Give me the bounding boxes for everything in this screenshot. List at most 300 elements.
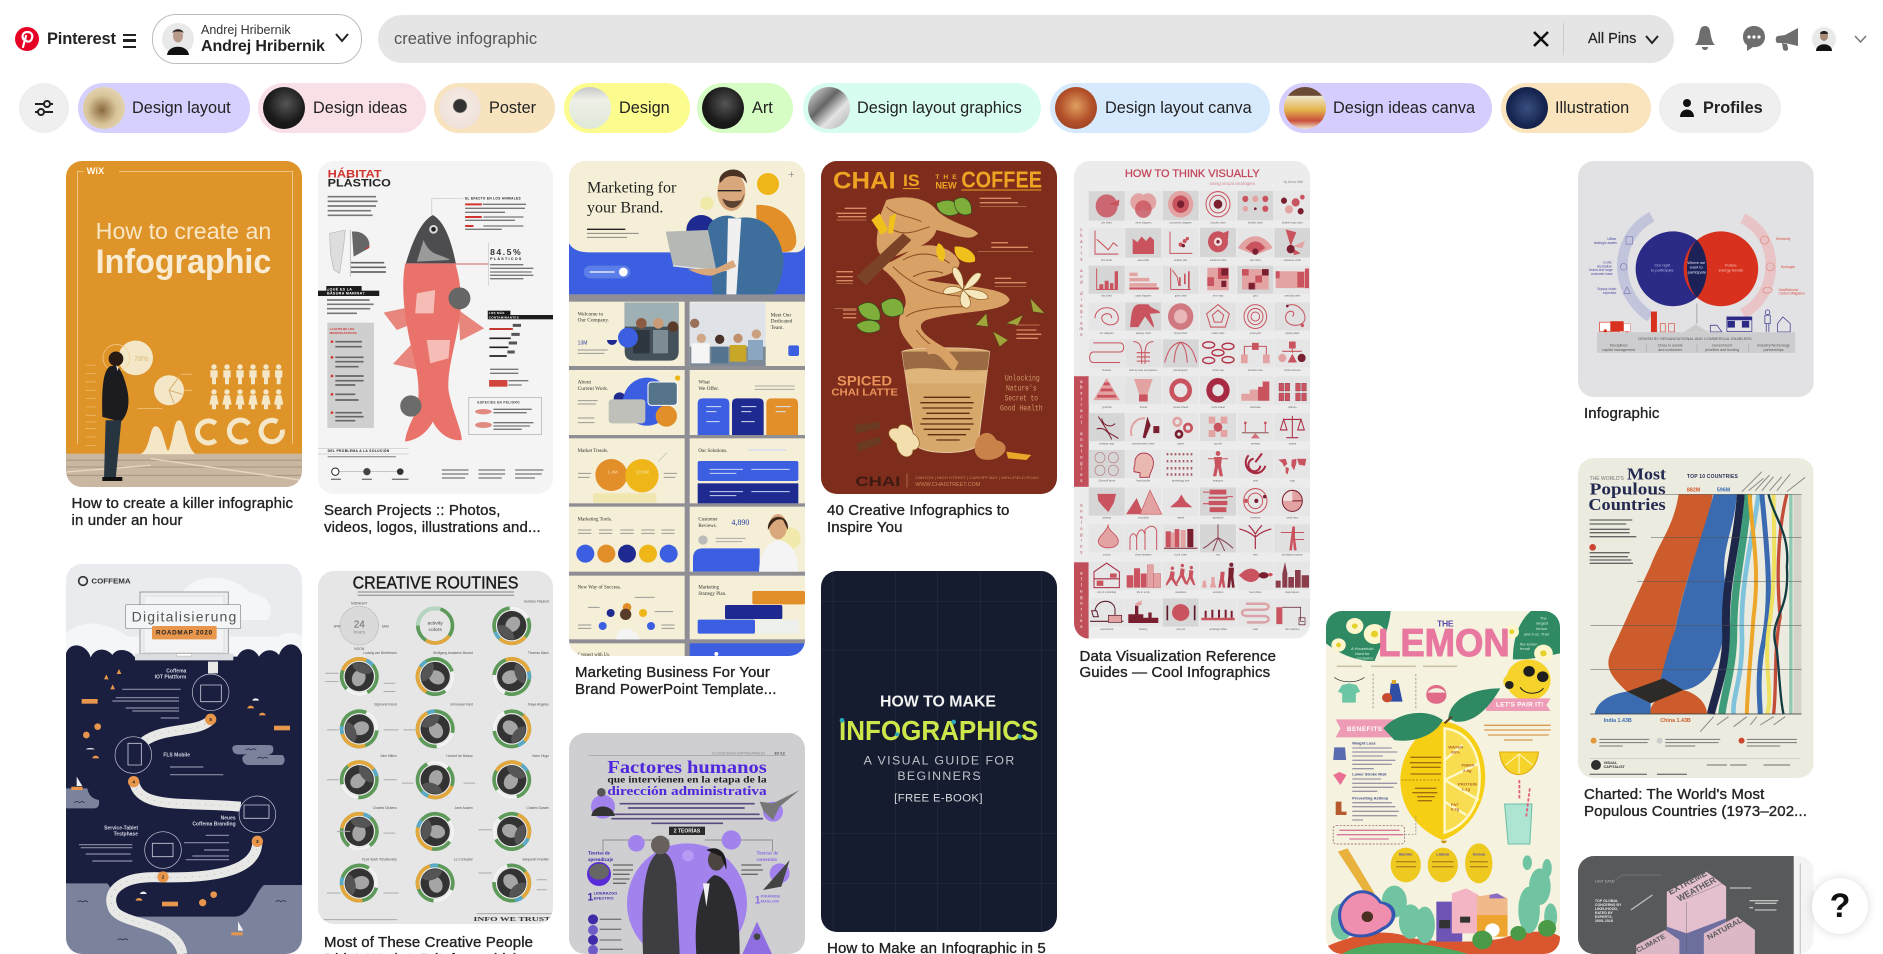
column label: EXTREME: [1666, 868, 1709, 897]
left text: TOP GLOBAL: [1595, 899, 1618, 903]
column label 2: WEATHER: [1675, 875, 1718, 903]
chip label: Profiles: [1703, 99, 1763, 117]
pin: marketing brand template: [569, 161, 805, 698]
right labels: Hydrogen: [1781, 265, 1795, 269]
leaf text: Centuries: [1356, 656, 1373, 660]
row 1: [1088, 191, 1310, 225]
row 1: circular chart: [1210, 220, 1225, 225]
poster image: human factors: [569, 733, 805, 954]
small circles and pyramid: [588, 914, 772, 954]
profile bold name: Andrej Hribernik: [201, 38, 325, 55]
argentina map: [330, 230, 386, 277]
left labels: brand and large: [1589, 268, 1613, 272]
from problem to solution: [318, 448, 543, 479]
row 6: funnel: [1139, 405, 1147, 409]
top countries heading: [1687, 474, 1739, 494]
flowers: [1331, 618, 1552, 662]
varieties: Lisbon: [1436, 853, 1449, 857]
profile avatar: [162, 23, 194, 55]
names: Ludwig van Beethoven: [363, 651, 397, 655]
names: Honoré de Balzac: [446, 754, 473, 758]
activity colors ring: [418, 608, 452, 643]
caption: 40 Creative Infographics to: [827, 502, 1010, 519]
right labels: Carbon Mitigation: [1779, 292, 1805, 296]
intro lines: [328, 197, 378, 215]
enablers bar: [1597, 332, 1795, 353]
slide: market trends: 10.5M: [636, 469, 649, 474]
pie charts: 78%: [134, 354, 149, 363]
row 3: bar chart: [1101, 293, 1112, 298]
row 1: venn diagram: [1135, 220, 1152, 225]
chip: Design layout: Design layout: [132, 99, 231, 117]
icon: all pins chevron: [1645, 35, 1659, 44]
row 12: one pot: [1176, 627, 1185, 631]
digitalisierung box: [125, 605, 240, 629]
slide: what we offer: We Offer.: [698, 385, 719, 392]
right labels: Electricity: [1776, 237, 1791, 241]
chip: Illustration: Illustration: [1555, 99, 1629, 117]
leaf text: [1351, 616, 1549, 660]
theories tag: [669, 827, 705, 835]
chip: Illustration: [1501, 83, 1651, 133]
plastic percentage: [455, 243, 533, 286]
venn labels: to participate: [1651, 267, 1674, 272]
scene: guitar: [1337, 848, 1395, 938]
pin: the lemon: [1326, 611, 1560, 954]
row 8: map: [1289, 480, 1295, 483]
leadership: MASLOW: [761, 899, 779, 904]
icon: bell: [1695, 26, 1715, 50]
caption: [1584, 786, 1807, 820]
enablers bar: DRIVEN BY ORGANISATIONAL AND COMMERCIAL ENABLERS: [1638, 337, 1752, 341]
title: [328, 167, 391, 190]
what is marine litter label: ¿QUÉ ES LA: [327, 286, 352, 291]
names: Benjamin Franklin: [522, 857, 549, 861]
caption: Guides — Cool Infographics: [1080, 664, 1270, 681]
venn labels: Our right: [1655, 262, 1671, 267]
slide: what we offer: What: [698, 380, 710, 386]
axis ticks: [85, 365, 95, 445]
row 2: nebulous chart: [1283, 258, 1301, 262]
pin: how to think visually: [1074, 161, 1310, 681]
24 hours clock: MIDNIGHT: [351, 601, 367, 605]
row 5: decision tree: [1247, 368, 1263, 372]
visual capitalist logo: VISUAL: [1604, 761, 1618, 765]
caption: Infographic: [1584, 405, 1660, 422]
leaf text: Used for: [1354, 652, 1370, 656]
lemon slice labels: [1448, 744, 1477, 812]
smiling lemon: [1503, 659, 1550, 701]
left labels: strategic assets: [1594, 241, 1617, 245]
mountains: [140, 420, 195, 454]
leadership: EFECTIVO: [594, 896, 614, 901]
bullets: [78, 689, 228, 861]
search divider: [1563, 23, 1564, 55]
row 4: polar grid: [1249, 331, 1261, 335]
tagline: Nature's: [1006, 384, 1037, 394]
lemon slice labels: FIBER: [1461, 763, 1474, 768]
caption: [1080, 648, 1276, 681]
caption: videos, logos, illustrations and...: [324, 519, 541, 536]
subtitle: using visual analogies: [1209, 181, 1255, 187]
title: Countries: [1588, 495, 1666, 514]
caption: [827, 502, 1010, 536]
row 4: radar chart: [1211, 331, 1224, 335]
lemon slice labels: 88%: [1451, 749, 1460, 754]
microplastics panel: [327, 323, 374, 428]
leaf text: A Household: [1351, 647, 1373, 651]
vertical labels: abstract analogies: [1078, 379, 1083, 484]
title: HÁBITAT: [328, 167, 382, 180]
benefits ribbon: [1335, 719, 1397, 737]
row 9: universe: [1250, 515, 1260, 519]
the lemon title: LEMON: [1378, 621, 1509, 665]
spiced chai latte: [831, 372, 898, 399]
brand footer: WWW.CHAISTREET.COM: [915, 482, 980, 488]
third column: [1635, 930, 1679, 954]
floor: [66, 454, 302, 487]
row 8: nest: [1252, 478, 1258, 483]
slice and glass: [1499, 752, 1538, 844]
side bands: [1074, 376, 1088, 638]
names: Charles Dickens: [373, 806, 397, 810]
row 1: bubble chart: [1248, 220, 1262, 225]
row 10: circulatory system: [1281, 552, 1303, 556]
caption: Most of These Creative People: [324, 934, 533, 951]
chip: Design ideas: [258, 83, 426, 133]
title: Factores humanos: [607, 757, 767, 777]
trees: [1472, 920, 1556, 949]
lower streams: [1595, 678, 1707, 714]
labels: Service-Tablet: [104, 825, 138, 831]
row 12: factory: [1139, 627, 1147, 631]
icon: account chevron: [1854, 36, 1866, 43]
benefit list: Weight Loss: [1352, 742, 1375, 746]
arc icons: [1620, 236, 1774, 294]
pin: creative routines: [318, 571, 553, 954]
portrait rings: [334, 601, 537, 908]
grid lines: [821, 571, 1057, 932]
lemon slice labels: PROTEIN: [1457, 781, 1477, 786]
bottom spices: [855, 422, 1031, 460]
venn labels: Future: [1725, 262, 1737, 267]
pin: venn infographic: [1578, 161, 1814, 422]
spiced chai latte: CHAI LATTE: [831, 388, 898, 399]
chip: Design ideas: Design ideas: [313, 99, 407, 117]
brand footer: CHAI: [855, 473, 900, 489]
pin: habitat plastico: [318, 161, 553, 536]
names: Gustave Flaubert: [524, 600, 549, 604]
polluter bars: [489, 329, 513, 356]
title: CHAI: [833, 168, 896, 195]
ring charts: [197, 420, 282, 443]
poster image: population streams: [1578, 458, 1814, 778]
bottom icons: [1600, 304, 1790, 333]
digitalisierung box: Digitalisierung: [131, 609, 236, 625]
brand footer: CANTON | HIGH STREET | CARDIFF BAY | WELLFIELD ROAD: [915, 475, 1039, 480]
lemon slice labels: FAT: [1450, 802, 1459, 807]
row 1: bubble map chart: [1282, 220, 1302, 225]
row 9: iceberg: [1102, 515, 1111, 519]
people icons: [209, 364, 283, 409]
chip: Design layout canva: Design layout canva: [1105, 99, 1252, 117]
slide: welcome: 13M: [578, 341, 587, 347]
number badges: [128, 714, 262, 883]
leaf text: the lemon: [1520, 642, 1537, 646]
left text: 2005–2018: [1595, 919, 1613, 923]
24 hours clock: 6PM: [334, 624, 341, 628]
number badges: 4: [132, 779, 135, 784]
names: Thomas Mann: [528, 651, 549, 655]
coffema logo: COFFEMA: [91, 577, 131, 586]
slide: marketing tools: [569, 507, 685, 572]
intro lines: [611, 804, 763, 823]
row 10: onions: [1102, 552, 1111, 556]
names: Pyotr Ilyich Tchaikovsky: [362, 857, 397, 861]
caption: Search Projects :: Photos,: [324, 502, 501, 519]
theories text left: Teorías de: [588, 852, 611, 857]
pin: how to create an infographic: [66, 161, 302, 529]
24 hours clock: 6AM: [382, 624, 389, 628]
chip: Art: Art: [752, 99, 773, 117]
icon: pinterest logo: [15, 27, 39, 51]
varieties: Bonnie: [1399, 853, 1412, 857]
bottom values: China 1.43B: [1660, 718, 1691, 724]
microplastics panel: MICROPLÁSTICOS: [330, 330, 357, 335]
row 2: scatter plot: [1174, 258, 1187, 262]
leadership: PIRÁMIDE: [761, 893, 781, 898]
subtitle: A VISUAL GUIDE FOR: [864, 753, 1014, 767]
names: Maya Angelou: [528, 703, 549, 707]
venn labels: want to: [1690, 264, 1703, 269]
chip: Poster: [434, 83, 555, 133]
venn labels: participate: [1688, 269, 1707, 274]
names: [362, 600, 549, 861]
title: NEW: [935, 181, 957, 191]
row 12: road: [1252, 627, 1258, 631]
slide: marketing strategy: Marketing: [698, 586, 720, 591]
free ebook: [FREE E-BOOK]: [894, 792, 982, 804]
names: John Milton: [380, 754, 397, 758]
right labels: Gas/Biofuels/: [1779, 288, 1798, 292]
labels: Coffema: [166, 669, 186, 675]
title: THE: [935, 174, 957, 181]
labels: Neues: [220, 815, 235, 821]
brand footer: [855, 473, 1039, 489]
flower: [943, 267, 988, 308]
row 10: chest headers: [1135, 552, 1152, 556]
row 8: [1088, 450, 1310, 483]
the lemon title: THE: [1437, 619, 1454, 629]
subtitle: BEGINNERS: [897, 769, 981, 783]
chip: Design: Design: [619, 99, 670, 117]
slide: new way of success: [569, 576, 685, 639]
endangered species box: [469, 397, 541, 435]
row 9: island: [1177, 515, 1184, 519]
row 3: gant chart: [1174, 293, 1186, 298]
row 3: grid: [1253, 293, 1258, 298]
row 8: head profile: [1136, 478, 1150, 483]
waves: [74, 749, 286, 940]
title: Populous: [1590, 480, 1666, 499]
number badges: 5: [209, 717, 212, 722]
number badges: 2: [161, 875, 164, 880]
pie charts: [102, 341, 192, 409]
enablers bar: Industry/Technology: [1757, 343, 1790, 347]
poster image: chai: [821, 161, 1057, 494]
wix logo: WiX: [86, 166, 104, 176]
row 6: spoke wheel: [1173, 405, 1188, 409]
names: Jane Austen: [455, 806, 473, 810]
search bar: [378, 15, 1674, 63]
left text: LIKELIHOOD,: [1595, 907, 1618, 911]
row 7: scales: [1288, 442, 1296, 446]
road: [111, 662, 257, 954]
slide: meet team: [690, 302, 805, 366]
enablers bar: Close to assets: [1658, 343, 1683, 347]
title: Most: [1627, 464, 1666, 483]
leaf text: The: [1539, 616, 1546, 620]
country streams: [1711, 494, 1791, 714]
icons row: [1334, 674, 1446, 710]
leadership: [587, 890, 781, 906]
slide: customer reviews: 4,890: [731, 518, 749, 527]
slide: marketing tools: Marketing Tools.: [578, 518, 612, 523]
most polluting label: [488, 310, 554, 319]
row 4: chord chart: [1174, 331, 1187, 335]
enablers bar: Government: [1712, 343, 1732, 347]
bottom values: India 1.43B: [1604, 718, 1632, 724]
icon: profile chevron: [335, 33, 349, 42]
slide: new way of success: New Way of Success.: [578, 586, 621, 591]
fish illustration: [384, 215, 484, 442]
pin: coffema roadmap: [66, 564, 302, 954]
chip: Design: [564, 83, 690, 133]
slide: customer reviews: Reviews.: [698, 524, 717, 529]
bottom values: [1604, 718, 1691, 724]
row 7: [1088, 413, 1310, 446]
title: PLÁSTICO: [328, 177, 391, 190]
side figures: [587, 788, 800, 890]
slide: welcome: Welcome to: [578, 311, 603, 317]
names: Immanuel Kant: [451, 703, 473, 707]
title: [1588, 464, 1666, 514]
row 10: tree: [1253, 552, 1258, 556]
from problem to solution: DEL PROBLEMA A LA SOLUCIÓN: [328, 448, 390, 453]
row 8: anatomy: [1212, 478, 1223, 483]
row 6: dollops: [1288, 405, 1297, 409]
poster image: human factors: ECOSISTEMAS EMPRESARIALES: [712, 752, 766, 756]
varieties: Genoa: [1472, 853, 1485, 857]
big lemon: [1400, 722, 1485, 843]
icon: clear search: [1533, 31, 1549, 47]
caption: [72, 495, 293, 529]
row 5: side by side comparison: [1129, 368, 1158, 372]
vertical labels: [1078, 227, 1083, 630]
slide: market trends: Market Trends.: [578, 449, 608, 454]
teal dots: [840, 718, 1022, 739]
blue stream top: [1657, 494, 1737, 692]
activity colors ring: activity: [428, 621, 443, 627]
tagline: Secret to: [1005, 394, 1038, 404]
white sails: [76, 698, 259, 931]
slide: contact: [569, 643, 805, 658]
orange stream top: [1608, 494, 1713, 692]
row 9: clock face: [1286, 515, 1298, 519]
side arcs: [1622, 217, 1771, 317]
clouds: [66, 578, 302, 663]
slide: customer reviews: [690, 507, 805, 572]
caption: How to create a killer infographic: [72, 495, 293, 512]
row 2: [1088, 228, 1310, 262]
labels left and right: [836, 198, 1041, 338]
row 4: spiral graph: [1285, 331, 1299, 335]
icon: menu: [123, 34, 136, 48]
row 11: life in a city: [1136, 590, 1150, 594]
caption: Inspire You: [827, 519, 903, 536]
lemon slice labels: 2.8g: [1462, 768, 1472, 773]
slide: market trends: [569, 438, 685, 503]
number badges: 3: [256, 839, 259, 844]
poster image: dark ebook cover: [821, 571, 1057, 932]
poster image: Wix infographic: [66, 161, 302, 487]
row 5: dendrogram: [1173, 368, 1188, 372]
theories tag: 2 TEORÍAS: [674, 827, 701, 835]
endangered species box: ESPECIES EN PELIGRO: [477, 400, 520, 404]
scene: cacti: [1330, 855, 1557, 943]
poster image: visual analogies grid: by Anna Vital: [1283, 180, 1303, 184]
left text: EXPERTS,: [1595, 915, 1613, 919]
leadership: 1: [587, 892, 593, 904]
left labels: Supply chain: [1597, 287, 1616, 291]
benefits ribbon: BENEFITS: [1346, 726, 1382, 733]
chip: Design layout graphics: Design layout graphics: [857, 99, 1022, 117]
left labels: customer base: [1591, 272, 1613, 276]
row 11: marathon: [1175, 590, 1186, 594]
row 11: evolution: [1212, 590, 1223, 594]
names: Charles Darwin: [526, 806, 549, 810]
poster image: lemon infographic: [1326, 611, 1560, 954]
theories text left: Teorías de: [756, 852, 779, 857]
pairing text: [1484, 725, 1550, 740]
chip: Profiles: [1659, 83, 1781, 133]
icon: user avatar: [1812, 27, 1836, 51]
row 5: timeline: [1102, 368, 1111, 372]
side notes: [325, 673, 547, 893]
dark ground with scallops: [66, 644, 302, 954]
slide: welcome: [569, 302, 685, 366]
title infographics: INFOGRAPHICS: [839, 715, 1038, 746]
flag lines: [1742, 472, 1805, 492]
poster image: powerpoint slides: [569, 161, 805, 656]
theories text left: contenido: [756, 858, 778, 863]
intro text: [1590, 520, 1636, 563]
slide: solutions: Our Solutions.: [698, 449, 728, 454]
title: dirección administrativa: [607, 784, 767, 798]
most polluting label: CONTAMINANTES: [489, 315, 519, 319]
tagline: [1000, 374, 1043, 414]
chip: Design layout graphics: [803, 83, 1041, 133]
top countries heading: 596M: [1717, 488, 1731, 494]
leadership: 1: [755, 894, 761, 906]
row 5: block schema: [1284, 368, 1300, 372]
row 6: staircase: [1250, 405, 1261, 409]
slide: what we offer: [690, 370, 805, 435]
slide: marketing strategy: [690, 576, 805, 639]
title: [833, 166, 1042, 195]
icon: chat: [1743, 26, 1765, 51]
search text: creative infographic: [394, 30, 537, 48]
